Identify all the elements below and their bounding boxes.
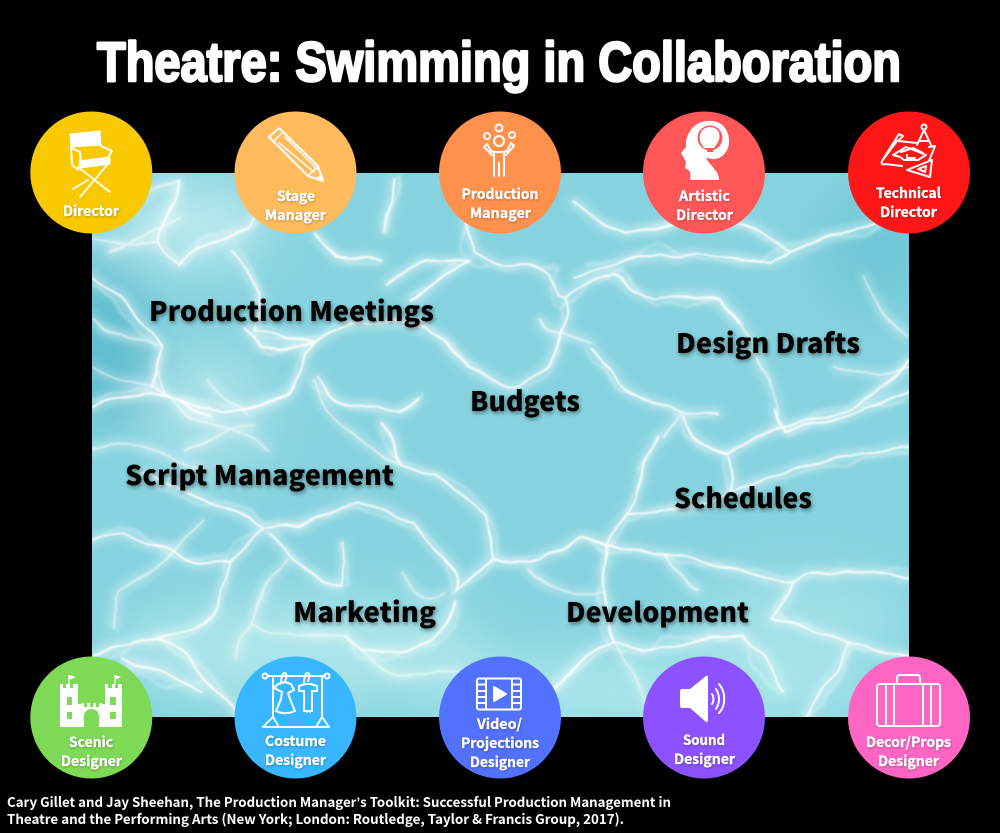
label: Technical Director: Technical xyxy=(876,183,942,203)
icon: juggler xyxy=(484,124,515,176)
role: Director xyxy=(30,112,152,234)
role: Scenic Designer xyxy=(30,656,152,778)
label: Production Manager xyxy=(462,184,538,223)
label: Costume Designer: Designer xyxy=(265,750,327,770)
label: Sound Designer xyxy=(674,730,736,769)
label: Costume Designer: Costume xyxy=(265,731,326,751)
label: Scenic Designer xyxy=(61,732,123,771)
label: Production Manager: Production xyxy=(462,184,538,204)
label: Production Manager: Manager xyxy=(470,203,532,223)
label: Technical Director xyxy=(876,183,942,222)
label: Sound Designer: Sound xyxy=(683,730,725,750)
role: Decor/Props Designer xyxy=(848,656,970,778)
icon: suitcase xyxy=(877,675,940,726)
topic: Production Meetings: Production Meetings xyxy=(149,290,434,329)
label: Artistic Director: Director xyxy=(676,205,734,225)
topic: Schedules: Schedules xyxy=(674,477,812,516)
topic: Development: Development xyxy=(566,591,749,630)
label: Stage Manager: Manager xyxy=(265,205,327,225)
icon: costume rack xyxy=(262,673,330,727)
label: Scenic Designer: Designer xyxy=(61,751,123,771)
role: Artistic Director xyxy=(643,112,765,234)
panel: pool water photo xyxy=(60,173,940,725)
label: Video/Projections Designer: Projections xyxy=(461,733,539,753)
icon: head with light bulb xyxy=(681,121,729,180)
icon: pencil xyxy=(269,128,323,181)
label: Stage Manager xyxy=(265,186,327,225)
label: Stage Manager: Stage xyxy=(277,186,315,206)
role: Costume Designer xyxy=(234,656,356,778)
label: Decor/Props Designer: Decor/Props xyxy=(866,732,951,752)
topic: Budgets: Budgets xyxy=(470,380,580,419)
label: Video/Projections Designer xyxy=(461,714,539,772)
label: Video/Projections Designer: Video/ xyxy=(476,714,523,734)
topic: Script Management: Script Management xyxy=(125,454,394,493)
role: Production Manager xyxy=(439,112,561,234)
role: Video/Projections Designer xyxy=(439,656,561,778)
topic: Design Drafts: Design Drafts xyxy=(676,322,860,361)
citation footer: Theatre and the Performing Arts (New York; London: Routledge, Taylor & Francis Group, 2017). xyxy=(7,808,624,828)
label: Artistic Director: Artistic xyxy=(678,186,730,206)
icon: speaker xyxy=(680,676,724,722)
label: Sound Designer: Designer xyxy=(674,749,736,769)
role: Stage Manager xyxy=(234,112,356,234)
icon: director's chair xyxy=(70,131,112,197)
label: Decor/Props Designer xyxy=(866,732,951,771)
icon: film strip xyxy=(477,678,521,710)
icon: castle xyxy=(60,675,122,727)
icon: blueprint and compass xyxy=(882,124,935,177)
citation footer xyxy=(7,791,671,828)
role: Sound Designer xyxy=(643,656,765,778)
topic: Marketing: Marketing xyxy=(293,591,436,630)
label: Artistic Director xyxy=(676,186,734,225)
label: Technical Director: Director xyxy=(880,202,938,222)
label: Decor/Props Designer: Designer xyxy=(878,751,940,771)
label: Costume Designer xyxy=(265,731,327,770)
label: Director: Director xyxy=(63,201,120,221)
citation footer: Cary Gillet and Jay Sheehan, The Production Manager’s Toolkit: Successful Production Management in xyxy=(7,791,671,811)
label: Scenic Designer: Scenic xyxy=(69,732,113,752)
label: Video/Projections Designer: Designer xyxy=(470,752,531,772)
role: Technical Director xyxy=(848,112,970,234)
